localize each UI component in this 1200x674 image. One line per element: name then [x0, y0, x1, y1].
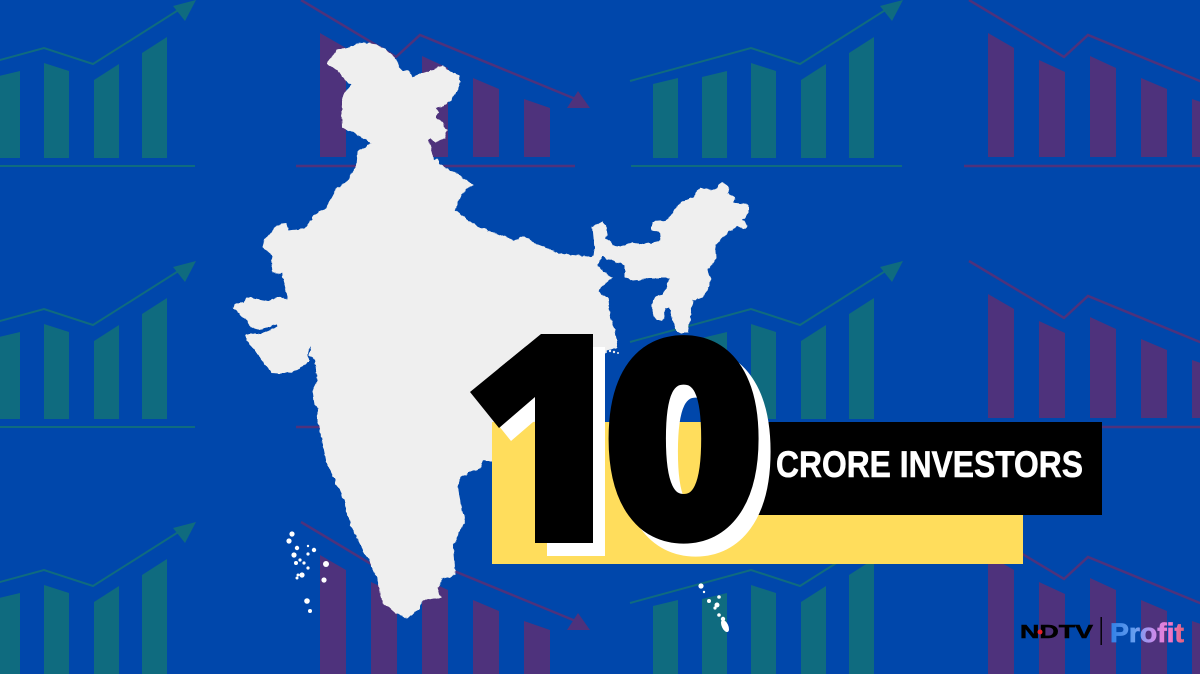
background pattern: falling bar charts: [296, 0, 1200, 674]
number 10: 1: [470, 209, 645, 626]
number 10: [470, 334, 759, 544]
Sundarbans delta islands: [605, 350, 619, 354]
map of India: [233, 43, 748, 618]
logo wordmark: Profit: Profit: [1110, 618, 1184, 648]
yellow banner: [492, 422, 1023, 564]
black label bar: [745, 422, 1102, 515]
number shadow: 1: [482, 222, 657, 639]
logo divider: [1100, 617, 1102, 645]
Lakshadweep islands: [286, 531, 329, 613]
Andaman and Nicobar islands: [698, 583, 731, 633]
logo: NDTV Profit: [1020, 617, 1184, 648]
number shadow: [500, 347, 771, 557]
logo wordmark: NDTV: NDTV: [1020, 622, 1093, 642]
logo red dot: [1038, 630, 1042, 634]
label: crore investors: CRORE INVESTORS: [776, 444, 1083, 485]
background pattern: rising bar charts: [0, 0, 903, 674]
number 10: 0: [605, 235, 762, 608]
number shadow: 0: [617, 248, 774, 621]
